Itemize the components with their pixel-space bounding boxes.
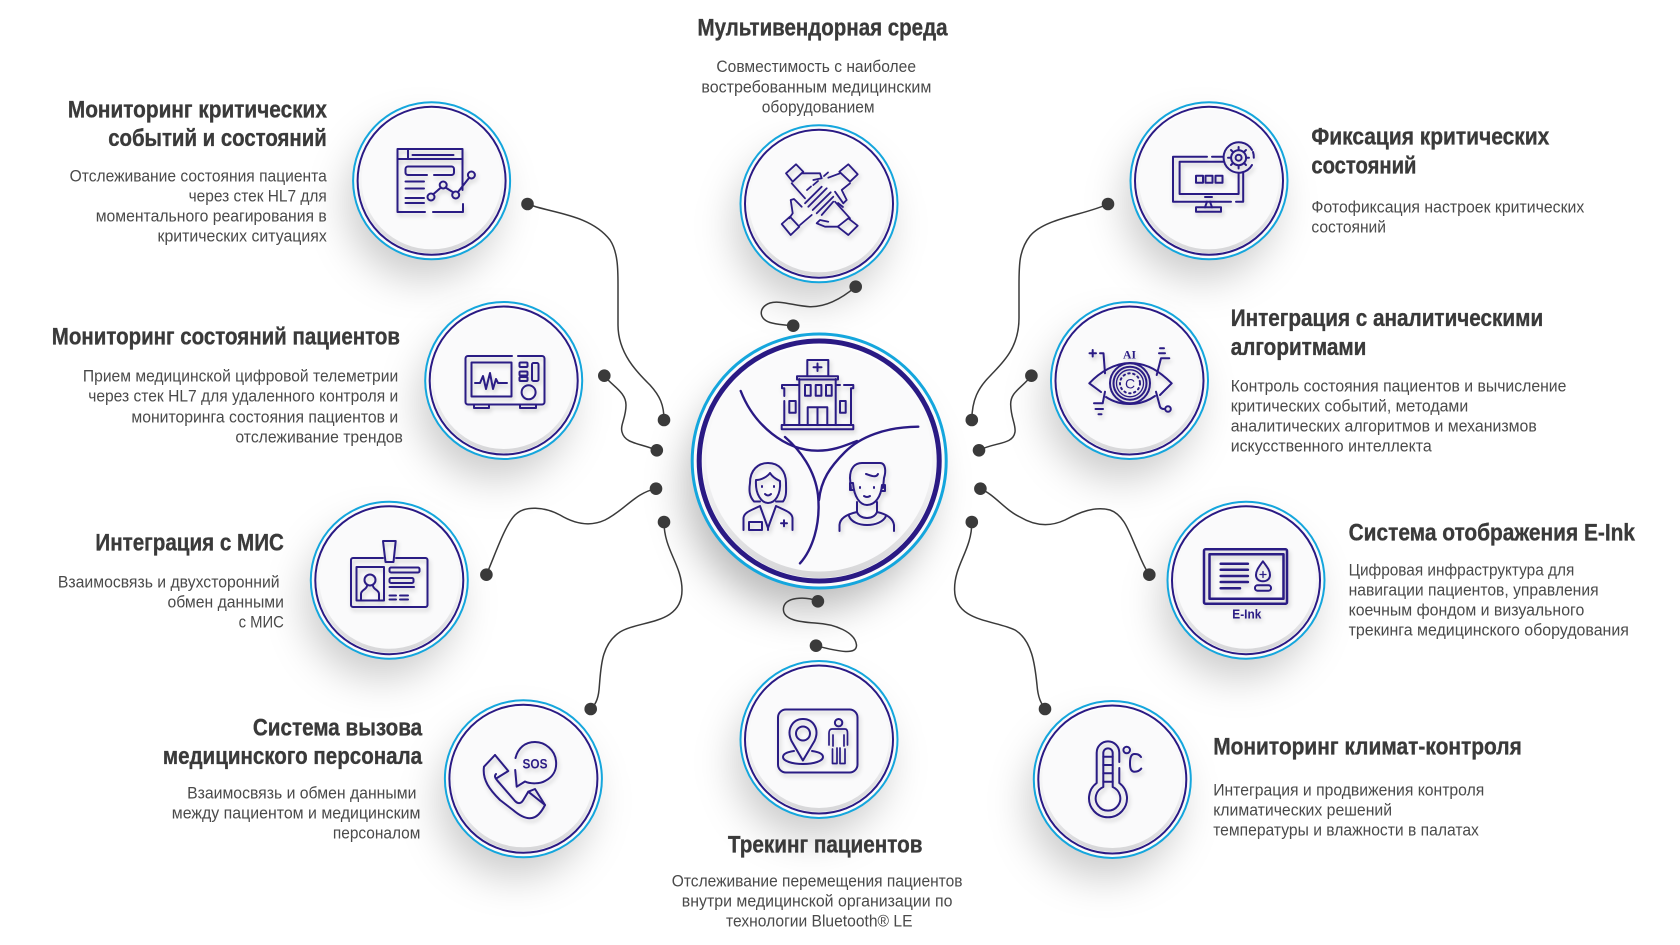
text: analytics: искусственного интеллекта bbox=[1231, 438, 1433, 456]
text: climate: климатических решений bbox=[1213, 801, 1392, 819]
heading: staff call: Система вызова bbox=[253, 714, 423, 741]
text: analytics: критических событий, методами bbox=[1231, 398, 1468, 416]
text: climate: температуры и влажности в палатах bbox=[1213, 821, 1480, 839]
heading: critical capture: Фиксация критических bbox=[1311, 123, 1550, 150]
text: critical events: критических ситуациях bbox=[158, 228, 328, 246]
text: climate: Интеграция и продвижения контроля bbox=[1213, 781, 1484, 799]
heading: MIS integration: Интеграция с МИС bbox=[95, 529, 284, 556]
icon: hospital bbox=[782, 360, 853, 429]
text: patient tracking: технологии Bluetooth® LE bbox=[726, 912, 912, 930]
panel: MIS integration bbox=[58, 502, 468, 678]
text: staff call: персоналом bbox=[333, 825, 420, 843]
text: MIS integration: с МИС bbox=[239, 614, 284, 632]
ring: patient tracking bbox=[740, 661, 898, 818]
text: patient monitoring bbox=[83, 368, 403, 446]
heading: patient monitoring: Мониторинг состояний пациентов bbox=[52, 323, 400, 350]
connectors: top and bottom bbox=[761, 280, 862, 652]
connectors: left side bbox=[480, 198, 682, 715]
heading: climate: Мониторинг климат-контроля bbox=[1213, 733, 1522, 760]
panel: patient tracking bbox=[672, 661, 963, 930]
text: analytics: Контроль состояния пациентов и вычисление bbox=[1231, 378, 1566, 396]
text: analytics: аналитических алгоритмов и механизмов bbox=[1231, 418, 1537, 436]
text: patient tracking: Отслеживание перемещения пациентов bbox=[672, 872, 963, 890]
heading: analytics: Интеграция с аналитическими bbox=[1231, 305, 1543, 332]
ring: patient monitoring bbox=[425, 302, 582, 459]
text: patient monitoring: мониторинга состояния пациентов и bbox=[131, 408, 398, 426]
heading: E-Ink: Система отображения E-Ink bbox=[1349, 519, 1636, 546]
text: MIS integration: обмен данными bbox=[168, 594, 284, 612]
text: E-Ink: трекинга медицинского оборудования bbox=[1349, 621, 1629, 639]
text: patient monitoring: отслеживание трендов bbox=[235, 428, 403, 446]
text: multivendor: востребованным медицинским bbox=[701, 78, 931, 96]
icon: thermometer bbox=[1089, 741, 1141, 817]
ring: MIS integration bbox=[311, 502, 468, 659]
icon: AI eye bbox=[1089, 347, 1172, 414]
ring: analytics bbox=[1051, 302, 1208, 459]
text: E-Ink: Цифровая инфраструктура для bbox=[1349, 561, 1574, 579]
text: staff call: между пациентом и медицинским bbox=[172, 805, 420, 823]
text: critical events: через стек HL7 для bbox=[189, 188, 327, 206]
dividers: three sector curves bbox=[741, 391, 918, 563]
heading: analytics: алгоритмами bbox=[1231, 334, 1366, 361]
text: staff call bbox=[172, 785, 420, 843]
text: MIS integration bbox=[58, 574, 284, 632]
icon: AI eye: C bbox=[1125, 376, 1135, 392]
text: critical capture bbox=[1311, 198, 1585, 236]
icon: ID badge bbox=[351, 541, 428, 607]
text: analytics bbox=[1231, 378, 1566, 456]
text: critical capture: состояний bbox=[1311, 218, 1386, 236]
text: E-Ink bbox=[1349, 561, 1629, 639]
panel: patient monitoring bbox=[52, 302, 582, 479]
text: patient tracking: внутри медицинской организации по bbox=[682, 892, 952, 910]
icon: joined hands bbox=[782, 164, 858, 235]
icon: location pin and person bbox=[778, 710, 858, 772]
panel: monitoring of critical events bbox=[68, 96, 510, 279]
ring: staff call bbox=[445, 700, 602, 857]
text: patient monitoring: Прием медицинской цифровой телеметрии bbox=[83, 368, 398, 386]
heading: critical capture: состояний bbox=[1311, 152, 1416, 179]
text: multivendor: оборудованием bbox=[762, 98, 875, 116]
icon: monitor with gear bbox=[1173, 142, 1254, 212]
icon: AI eye: AI bbox=[1123, 347, 1136, 361]
panel: critical state capture bbox=[1125, 102, 1585, 279]
text: critical events bbox=[70, 168, 328, 246]
heading: analytics bbox=[1231, 305, 1543, 361]
text: patient monitoring: через стек HL7 для удаленного контроля и bbox=[88, 388, 398, 406]
ring: E-Ink bbox=[1168, 502, 1324, 659]
icon: patient monitor bbox=[466, 356, 544, 408]
heading: patient tracking: Трекинг пациентов bbox=[728, 832, 922, 859]
icon: phone with SOS bubble bbox=[484, 742, 556, 818]
icon: doctor bbox=[744, 463, 792, 530]
ring: critical events bbox=[353, 102, 510, 259]
icon: patient bbox=[840, 463, 894, 531]
heading: critical events: Мониторинг критических bbox=[68, 96, 327, 123]
text: E-Ink: коечным фондом и визуального bbox=[1349, 601, 1584, 619]
icon: dashboard with chart bbox=[398, 149, 475, 212]
panel: analytics integration bbox=[1045, 302, 1566, 479]
text: critical events: Отслеживание состояния пациента bbox=[70, 168, 328, 186]
ring: multivendor bbox=[740, 125, 898, 282]
connectors: right side bbox=[955, 198, 1156, 715]
heading: critical events: событий и состояний bbox=[108, 125, 327, 152]
heading: critical events bbox=[68, 96, 327, 152]
heading: staff call: медицинского персонала bbox=[163, 743, 423, 770]
text: critical events: моментального реагирования в bbox=[96, 208, 327, 226]
panel: staff call system bbox=[163, 700, 602, 877]
text: staff call: Взаимосвязь и обмен данными bbox=[187, 785, 416, 803]
icon: E-Ink panel: E-Ink bbox=[1232, 607, 1262, 622]
text: climate bbox=[1213, 781, 1484, 839]
text: MIS integration: Взаимосвязь и двухсторонний bbox=[58, 574, 280, 592]
heading: critical capture bbox=[1311, 123, 1550, 179]
panel: central circle bbox=[686, 334, 946, 610]
ring: central bbox=[692, 334, 946, 588]
panel: E-Ink display system bbox=[1162, 502, 1636, 678]
icon: E-Ink panel bbox=[1204, 549, 1287, 622]
ring: critical capture bbox=[1130, 102, 1288, 259]
heading: staff call bbox=[163, 714, 423, 770]
panel: climate control monitoring bbox=[1028, 701, 1522, 878]
text: multivendor bbox=[701, 58, 931, 116]
text: E-Ink: навигации пациентов, управления bbox=[1349, 581, 1599, 599]
text: critical capture: Фотофиксация настроек критических bbox=[1311, 198, 1585, 216]
panel: multivendor environment bbox=[698, 15, 948, 302]
text: patient tracking bbox=[672, 872, 963, 930]
icon: phone with SOS bubble: SOS bbox=[522, 755, 548, 771]
ring: climate bbox=[1034, 701, 1191, 858]
heading: multivendor: Мультивендорная среда bbox=[698, 15, 948, 42]
text: multivendor: Совместимость с наиболее bbox=[716, 58, 916, 76]
